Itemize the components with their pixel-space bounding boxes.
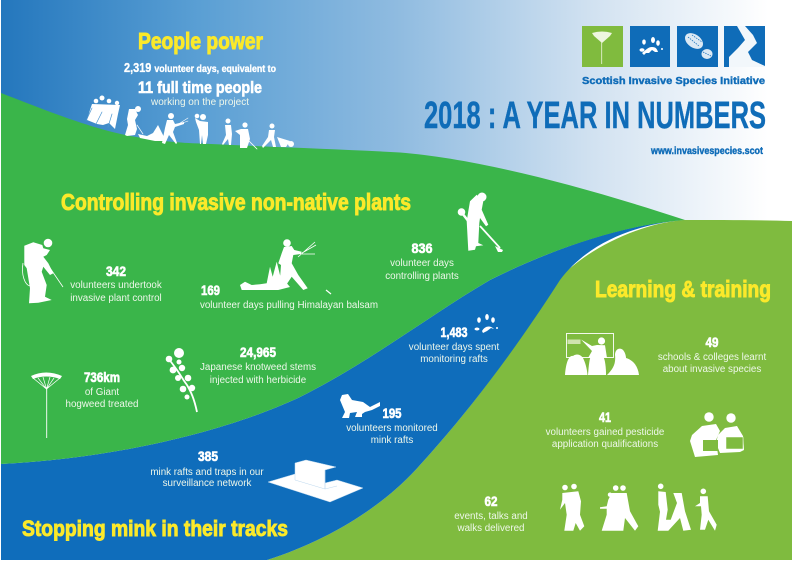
icon: balsam puller silhouette [240,239,331,294]
text: of Giant: of Giant [85,387,119,398]
stat: volunteer days: 2,319 volunteer days, equivalent to [124,60,276,75]
sky gradient background [1,0,792,225]
text: walks delivered: walks delivered [457,523,524,534]
icon: strimmer silhouette [458,192,503,252]
text: surveillance network: surveillance network [163,478,251,489]
stat: 62: 62 [484,494,498,509]
section: people power [86,28,294,149]
logo tile: river [724,26,765,67]
logo wordmark: Scottish Invasive Species Initiative [582,75,765,87]
stat: 24,965: 24,965 [240,345,276,360]
website: www.invasivespecies.scot [650,146,764,157]
text: mink rafts and traps: mink rafts and traps in our [150,467,264,478]
stat: 836: 836 [412,241,433,256]
logo tile: boot print [677,26,718,67]
icon: giant hogweed [31,372,62,438]
stat: 736km: 736km [84,370,120,385]
icon: mink raft [268,460,363,502]
text: monitoring rafts: monitoring rafts [420,354,488,365]
icon: mink silhouette [340,394,380,418]
section: controlling plants [22,189,503,438]
text: invasive plant control: invasive plant control [70,293,162,304]
text: volunteers monitored: volunteers monitored [346,423,438,434]
text: Japanese knotweed stems: Japanese knotweed stems [200,362,316,373]
text: application qualifications: application qualifications [552,439,658,450]
stat: full time people: 11 full time people [138,78,262,97]
section: learning [454,276,771,534]
heading: Learning & training: Learning & training [595,276,771,302]
text: injected with herbicide: injected with herbicide [210,375,307,386]
stat: 169: 169 [201,283,220,298]
panel: blue mink river [1,220,683,560]
section: logo and title [424,26,766,157]
panel: green plants hill [1,93,685,464]
text: mink rafts: mink rafts [371,435,413,446]
text: volunteer days: volunteer days [390,258,454,269]
icon: knotweed stem [166,348,197,412]
logo tile: hogweed [582,26,623,67]
text: volunteers gained pesticide: volunteers gained pesticide [546,427,665,438]
section: mink [22,314,499,541]
panel: light green learning hill [267,220,792,560]
heading: Stopping mink in their tracks: Stopping mink in their tracks [22,516,288,541]
text: about invasive species: about invasive species [663,364,761,375]
text: volunteer days spent: volunteer days spent [409,342,499,353]
stat: 385: 385 [198,449,218,464]
text: events, talks and: events, talks and [454,511,528,522]
icon: classroom [565,334,639,375]
stat: 342: 342 [106,264,126,279]
icon: two volunteers with papers [690,412,744,457]
stat: 195: 195 [382,406,402,421]
icon: walkers [560,484,717,531]
stat: 1,483: 1,483 [440,325,468,340]
heading: People power: People power [138,28,263,54]
icon: sprayer silhouette [22,239,63,303]
text: volunteers undertook: volunteers undertook [70,280,162,291]
text: volunteer days pulling Himalayan balsam: volunteer days pulling Himalayan balsam [200,300,378,311]
caption: working on the project: working on the project [150,97,249,108]
heading: Controlling invasive non-native plants: Controlling invasive non-native plants [61,189,411,215]
logo tile: paw print [630,26,670,67]
text: controlling plants: controlling plants [385,271,459,282]
stat: 49: 49 [706,335,718,350]
stat: 41: 41 [599,410,611,425]
text: schools & colleges learnt: schools & colleges learnt [658,352,766,363]
icon: paw print [474,314,498,333]
text: hogweed treated: hogweed treated [66,399,138,410]
icon: row of volunteer silhouettes [86,96,294,149]
